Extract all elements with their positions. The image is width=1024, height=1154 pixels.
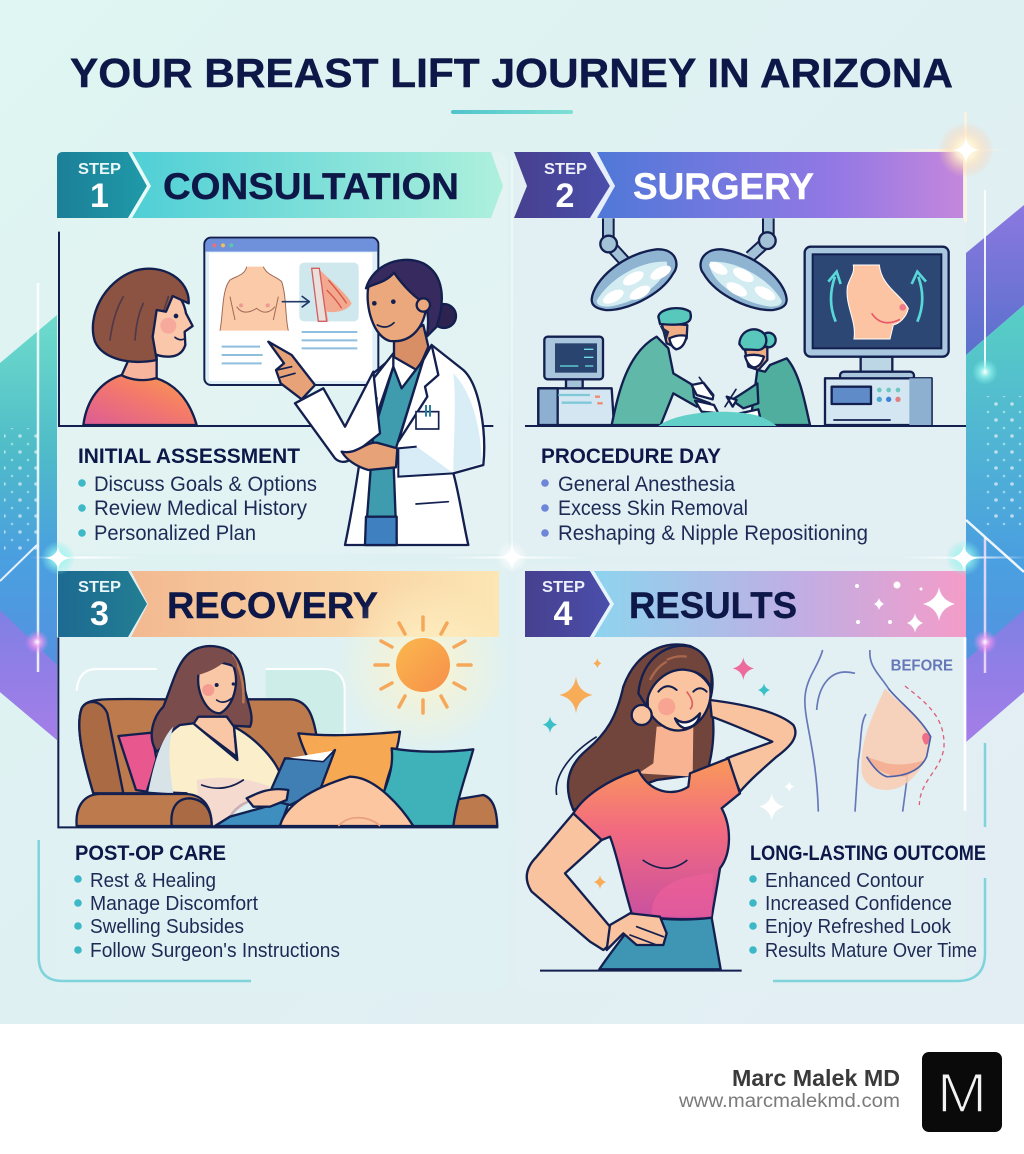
text: procedure day: General Anesthesia <box>558 473 735 496</box>
step 4 header banner: 4 <box>554 595 573 633</box>
text: post-op care: Swelling Subsides <box>90 915 244 938</box>
icon: sparkles <box>543 657 794 821</box>
text: initial assessment <box>78 444 317 545</box>
illustration: patient and doctor at screen <box>59 232 493 545</box>
icon: sofa back <box>79 699 497 826</box>
text: procedure day: Excess Skin Removal <box>558 497 748 520</box>
icon: before outline: BEFORE <box>891 657 953 674</box>
panel: results background <box>517 566 966 991</box>
step 2 header banner: STEP <box>544 161 587 178</box>
step 1 header banner: CONSULTATION <box>163 166 459 207</box>
text: post-op care: Manage Discomfort <box>90 892 258 915</box>
text: procedure day <box>541 444 868 545</box>
step 1 header banner: 1 <box>90 177 109 215</box>
light streaks and sparkles <box>0 112 1024 673</box>
title: YOUR BREAST LIFT JOURNEY IN ARIZONA <box>70 50 953 96</box>
panel: surgery background <box>514 152 966 554</box>
panel: consultation background <box>57 152 508 554</box>
step 4 header banner: RESULTS <box>629 585 797 626</box>
footer <box>0 1024 1024 1154</box>
footer brand name: Marc Malek MD <box>732 1065 900 1091</box>
illustration: happy woman with before diagram <box>527 637 965 971</box>
text: long-lasting outcome: LONG-LASTING OUTCOME <box>750 841 986 865</box>
decorative outline: recovery corner <box>39 840 251 981</box>
step 3 header banner: 3 <box>90 595 109 633</box>
panel: step 3 recovery <box>58 571 508 962</box>
illustration: operating room <box>525 218 966 426</box>
panel: step 2 surgery <box>514 152 966 545</box>
text: initial assessment: Personalized Plan <box>94 522 256 545</box>
icon: large monitor with breast diagram <box>805 247 949 425</box>
logo <box>922 1052 1002 1132</box>
step 3 header banner <box>58 571 499 637</box>
footer website: www.marcmalekmd.com <box>678 1091 900 1112</box>
step 2 header banner: 2 <box>556 177 574 215</box>
icon: patient <box>83 269 197 425</box>
text: initial assessment: Review Medical History <box>94 497 307 520</box>
text: initial assessment: INITIAL ASSESSMENT <box>78 444 300 468</box>
icon: presentation screen <box>204 238 378 385</box>
text: long-lasting outcome: Enhanced Contour <box>765 869 924 892</box>
left geometric shapes <box>0 315 57 740</box>
text: initial assessment: Discuss Goals & Options <box>94 473 317 496</box>
text: long-lasting outcome: Increased Confidence <box>765 892 952 915</box>
text: long-lasting outcome <box>749 841 986 962</box>
step 2 header banner <box>514 152 963 218</box>
step 2 header banner: SURGERY <box>633 166 814 207</box>
panel: recovery background <box>57 566 509 991</box>
icon: cushions <box>298 732 473 826</box>
icon: surgical lights <box>592 218 787 310</box>
text: procedure day: Reshaping & Nipple Repositioning <box>558 522 868 545</box>
icon: lead surgeon <box>612 308 718 425</box>
icon: woman with raised arm <box>527 644 795 971</box>
text: post-op care <box>74 841 340 962</box>
step 1 header banner <box>57 152 503 218</box>
step 3 header banner: STEP <box>78 579 121 596</box>
text: post-op care: POST-OP CARE <box>75 841 226 865</box>
icon: woman reading <box>148 646 413 826</box>
title divider <box>451 110 573 114</box>
icon: sun <box>338 580 508 750</box>
illustration: woman resting on sofa <box>58 637 498 827</box>
text: post-op care: Follow Surgeon's Instructions <box>90 939 340 962</box>
panel: step 1 consultation <box>57 152 503 545</box>
step 4 header banner: STEP <box>542 579 585 596</box>
icon: patient drape <box>658 412 777 426</box>
text: procedure day: PROCEDURE DAY <box>541 444 721 468</box>
icon: before outline <box>805 637 965 812</box>
text: post-op care: Rest & Healing <box>90 869 216 892</box>
icon: assisting surgeon <box>725 329 810 425</box>
icon: sofa front arm <box>77 794 212 826</box>
step 4 header banner <box>525 571 966 637</box>
text: long-lasting outcome: Results Mature Over Time <box>765 939 977 962</box>
icon: left monitor machine <box>538 337 614 425</box>
logo: M <box>937 1061 987 1124</box>
step 1 header banner: STEP <box>78 161 121 178</box>
text: long-lasting outcome: Enjoy Refreshed Look <box>765 915 952 938</box>
right geometric shapes <box>966 205 1024 742</box>
icon: doctor <box>268 260 484 545</box>
panel: step 4 results <box>525 571 986 971</box>
step 3 header banner: RECOVERY <box>167 585 378 626</box>
decorative outline: results corner <box>773 743 985 981</box>
